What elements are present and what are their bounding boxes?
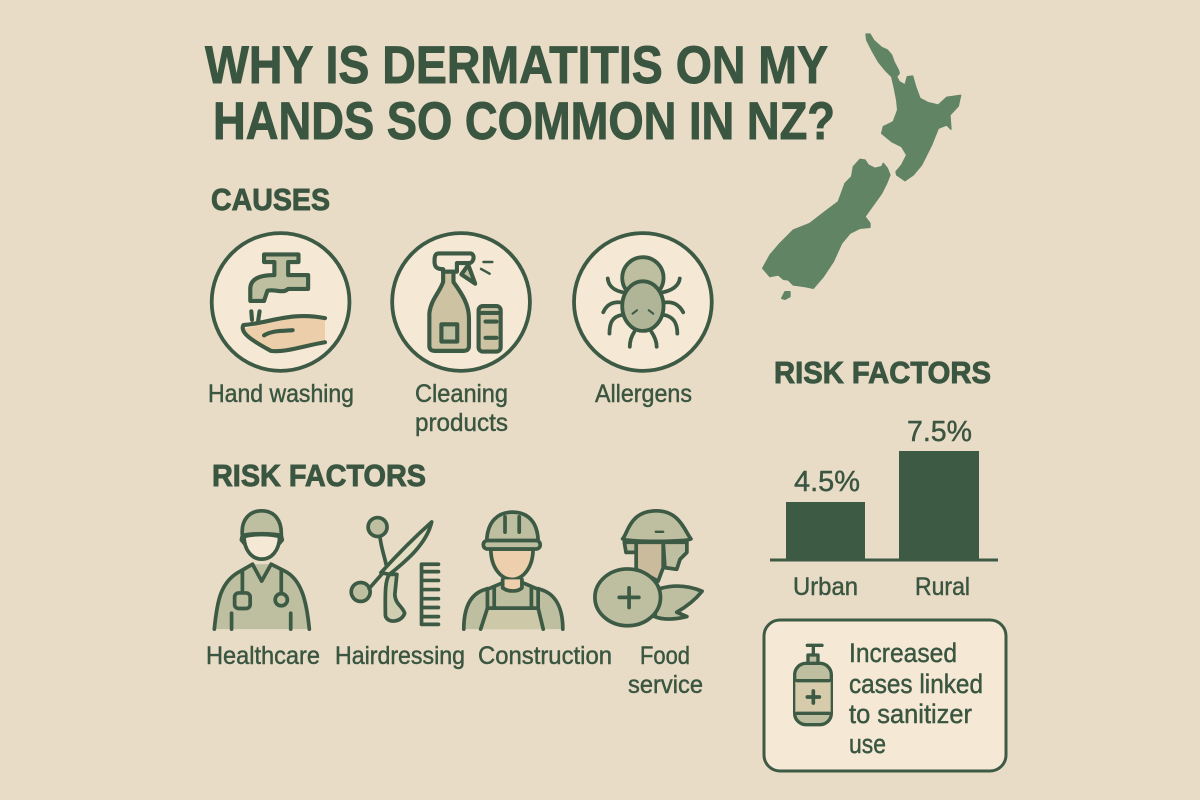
icon: scissors and comb [351,518,438,624]
labels: occupations: Healthcare [206,642,320,670]
panel: occupations [206,511,703,699]
title: WHY IS DERMATITIS ON MY [205,36,828,95]
icon: construction worker [464,512,563,629]
labels: occupations: Food [640,642,690,670]
heading: risk factors: RISK FACTORS [212,458,426,493]
title [205,36,835,151]
heading: causes: CAUSES [211,182,330,217]
bar chart: urban vs rural: 7.5% [907,416,972,448]
title: HANDS SO COMMON IN NZ? [213,92,835,151]
labels: causes: Cleaning [415,380,508,408]
bar chart: urban vs rural: 4.5% [794,466,860,498]
icon: food service [595,511,702,626]
labels: occupations: Hairdressing [335,642,465,670]
icon: cleaning products [392,233,530,371]
icon: healthcare worker [214,511,309,629]
heading: risk factors chart: RISK FACTORS [774,355,991,390]
labels: causes: Allergens [595,380,692,408]
bar chart: urban vs rural [770,416,998,601]
icon: sanitizer bottle [795,645,831,725]
labels: occupations: service [628,671,703,699]
text: sanitizer callout: cases linked [849,669,983,699]
labels: occupations [206,642,703,699]
callout: sanitizer [764,620,1006,771]
labels: causes: Hand washing [208,380,354,408]
labels: causes [208,380,692,437]
icon: allergens mite [574,233,712,371]
panel: causes icons [208,233,712,437]
text: sanitizer callout [849,638,983,759]
bar chart: urban vs rural: Rural [915,573,970,601]
text: sanitizer callout: use [849,729,886,759]
icon: hand washing [212,233,349,371]
labels: occupations: Construction [478,642,612,670]
text: sanitizer callout: Increased [849,638,957,668]
labels: causes: products [415,409,508,437]
text: sanitizer callout: to sanitizer [849,699,972,729]
map: New Zealand [763,34,961,299]
bar chart: urban vs rural: Urban [793,573,858,601]
